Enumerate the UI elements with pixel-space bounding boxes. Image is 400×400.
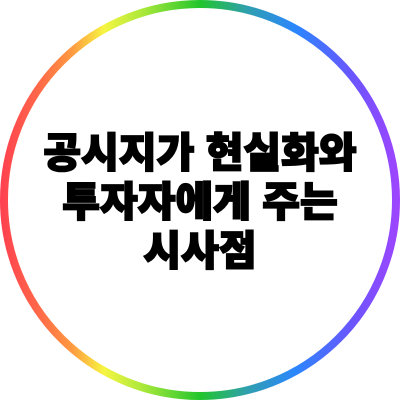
title: 공시지가 현실화와 bbox=[43, 130, 357, 176]
title: 투자자에게 주는 bbox=[62, 179, 338, 225]
title bbox=[43, 130, 357, 274]
title: 시사점 bbox=[143, 228, 257, 274]
